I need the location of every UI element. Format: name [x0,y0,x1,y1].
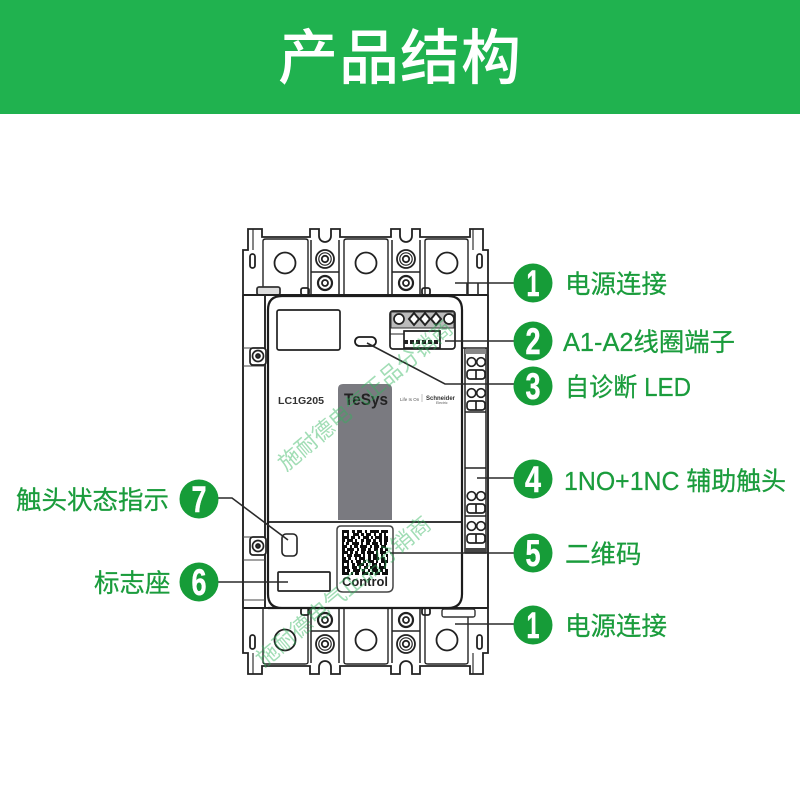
left side rails [243,348,265,600]
Schneider brand mark: Electric [436,401,448,405]
callout 5: QR code: 二维码 [565,541,642,569]
LED indicator [355,337,376,346]
upper window [277,310,340,350]
side mounting screws [250,348,266,555]
top power terminals [243,229,488,295]
QR code panel [337,526,393,592]
callout 6: label holder: 标志座 [94,570,171,598]
callout 2: coil terminals: A1-A2线圈端子 [563,329,735,357]
Control label: Control [342,574,388,589]
title: 产品结构 [278,25,522,92]
callout 3: self diagnosis LED [514,366,691,407]
coil terminal block [390,311,455,349]
bottom power terminals [243,608,488,674]
contactor outline [243,229,488,674]
callout 1 bottom: power connection: 1 [526,605,540,646]
callout 1 bottom: power connection: 电源连接 [565,613,667,641]
callout 2: coil terminals: 2 [526,321,540,362]
callout 3: self diagnosis LED: 自诊断 LED [565,374,691,402]
callout 1 top: power connection: 1 [526,263,540,304]
callout 4: auxiliary contacts: 1NO+1NC 辅助触头 [564,468,786,496]
callout 7: contact state indicator: 触头状态指示 [16,487,169,515]
header band [0,0,800,114]
callout 5: QR code: 5 [526,533,540,574]
callout 2: coil terminals [514,321,735,362]
auxiliary contact column [463,348,487,553]
callout 4: auxiliary contacts: 4 [525,459,541,500]
callout 4: auxiliary contacts [514,459,786,500]
label holder [278,572,330,591]
callout 6: label holder [94,562,218,603]
TeSys brand: TeSys [344,390,388,409]
callout 1 bottom: power connection [514,605,667,646]
front cover [268,296,462,608]
callout 1 top: power connection [514,263,667,304]
callout 1 top: power connection: 电源连接 [565,271,667,299]
callout 7: contact state indicator [16,479,218,520]
watermark: upper: 施耐德电气正品分销商 [273,315,458,476]
callout 6: label holder: 6 [192,562,206,603]
leader lines [215,283,516,624]
grey brand strip [338,384,392,520]
Schneider brand mark: Schneider [426,395,455,402]
Schneider brand mark [400,394,455,405]
watermark: lower: 施耐德电气正品分销商 [251,511,436,672]
callout 5: QR code [514,533,642,574]
model number: LC1G205 [278,395,324,407]
contactor body frame [243,295,488,608]
callout 7: contact state indicator: 7 [192,479,206,520]
callout 3: self diagnosis LED: 3 [526,366,540,407]
contact state window [282,534,297,556]
cover divider [268,521,462,523]
Schneider brand mark: Life Is On [400,397,420,402]
